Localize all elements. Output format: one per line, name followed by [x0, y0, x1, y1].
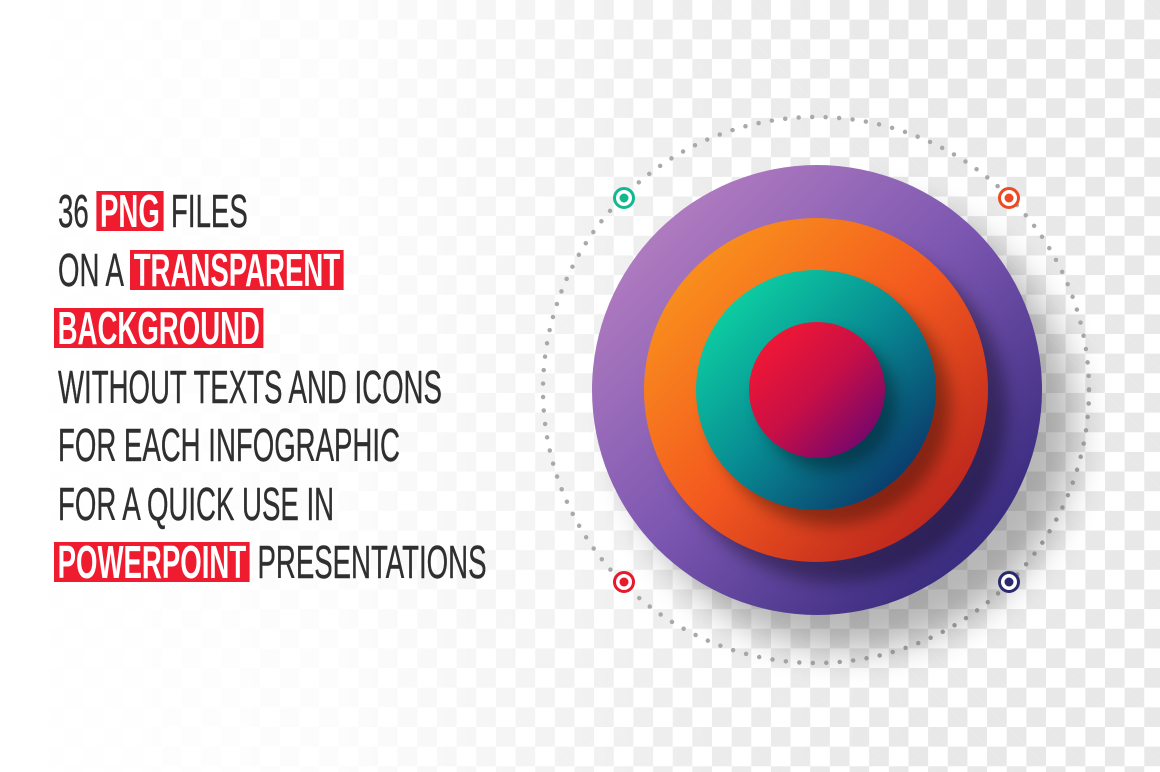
- line 2: TRANSPARENT: [134, 244, 340, 296]
- line 7: POWERPOINT: [58, 536, 246, 588]
- circle: purple outer: [592, 165, 1075, 650]
- marker: navy: [1000, 572, 1018, 592]
- line 5: FOR EACH INFOGRAPHIC: [58, 419, 400, 471]
- line 1: PNG: [100, 185, 160, 237]
- line 7: [54, 536, 486, 588]
- circle: teal: [696, 270, 950, 525]
- text block: feature list: [54, 185, 486, 588]
- line 1: 36 FILES: [58, 185, 248, 237]
- line 3: BACKGROUND: [58, 302, 260, 354]
- marker: red: [614, 572, 634, 592]
- marker: orange: [1000, 188, 1018, 208]
- marker: teal: [614, 188, 634, 208]
- circle: red center: [749, 322, 896, 470]
- line 6: FOR A QUICK USE IN: [58, 478, 334, 530]
- line 7: PRESENTATIONS: [257, 536, 486, 588]
- line 4: WITHOUT TEXTS AND ICONS: [58, 361, 442, 413]
- dotted ring: [543, 117, 1089, 663]
- line 2: ON A: [58, 244, 122, 296]
- circle: orange: [644, 218, 1007, 582]
